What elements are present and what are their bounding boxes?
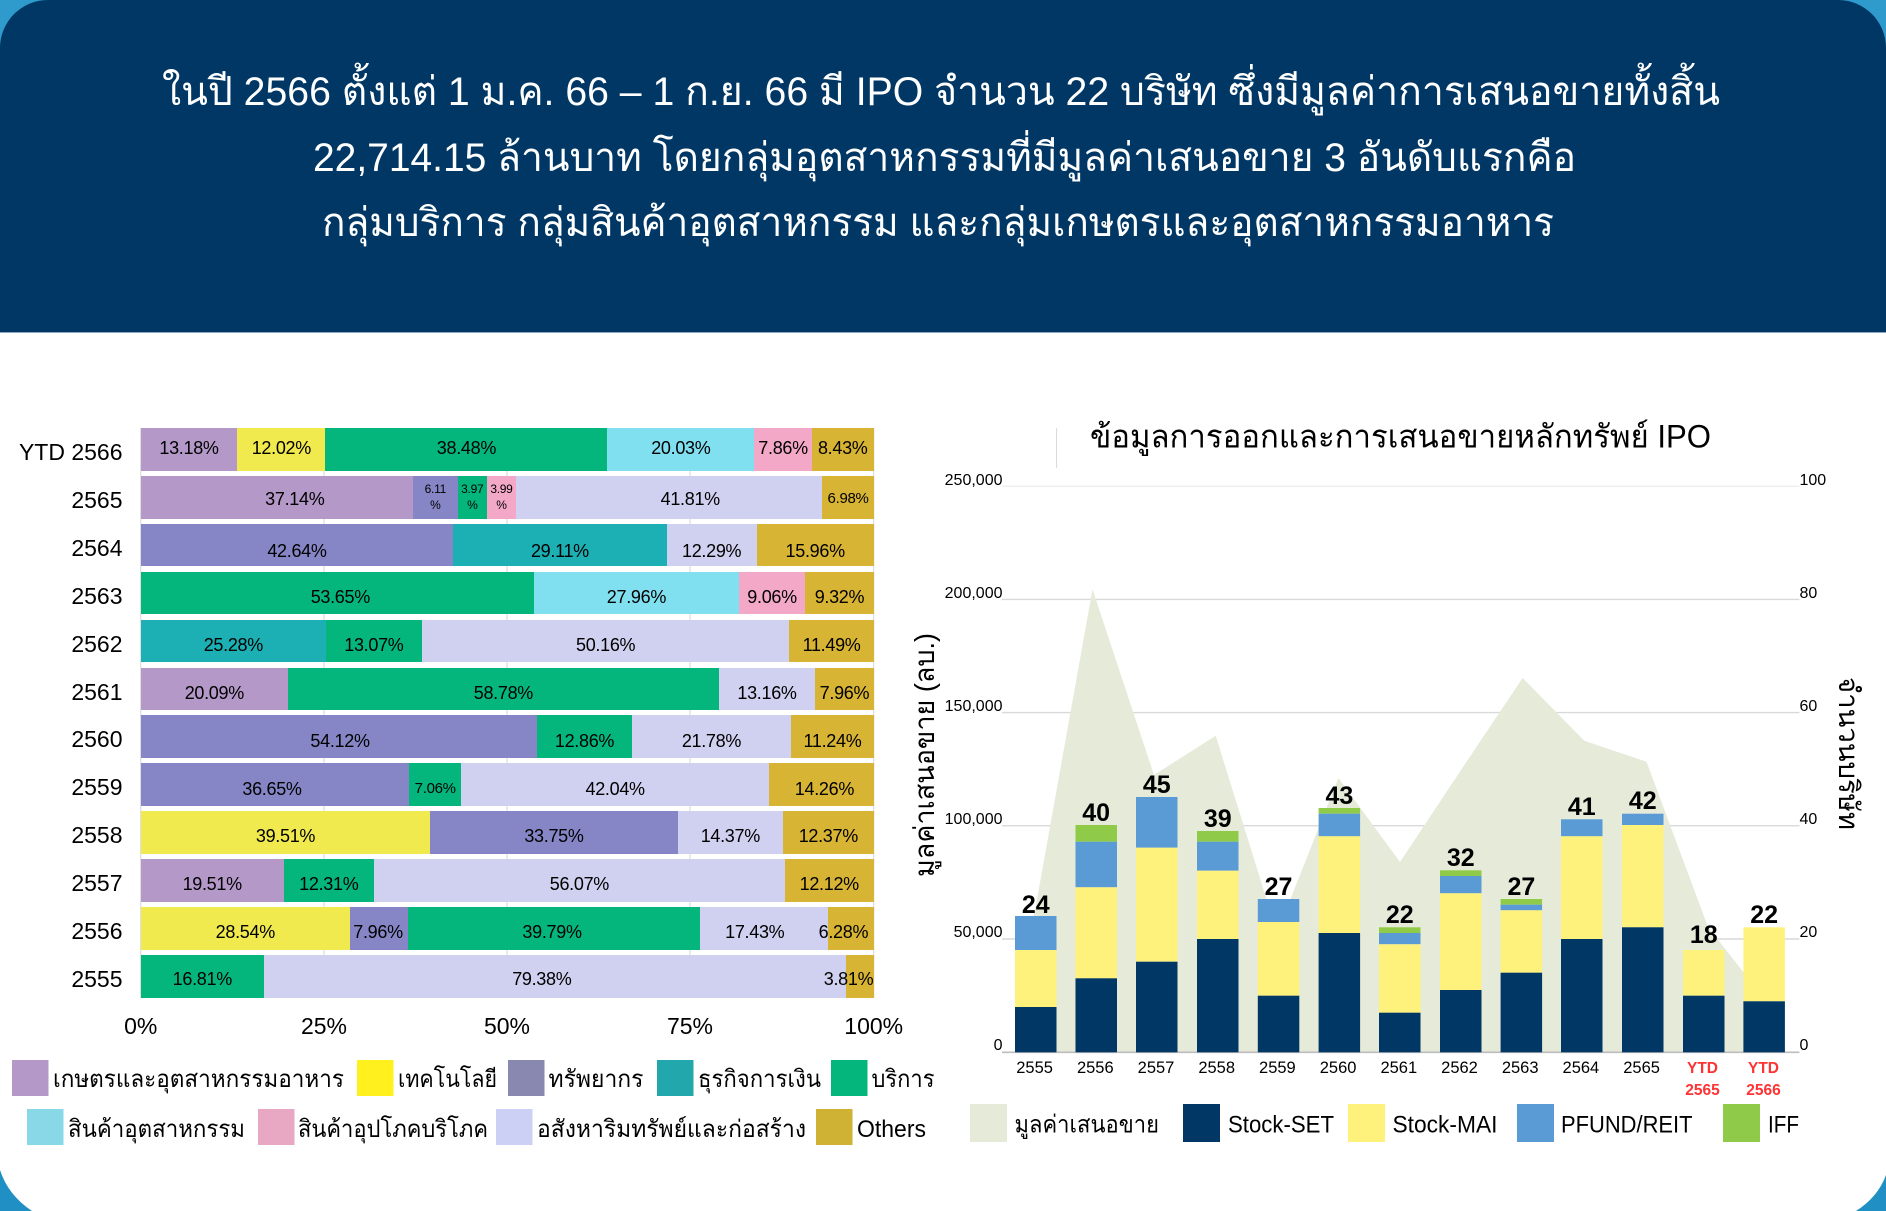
- right chart legend: [970, 1104, 1799, 1142]
- bar 2561: [141, 668, 874, 710]
- bar total labels: 27: [1265, 873, 1292, 901]
- bar 2563: [141, 572, 874, 614]
- right count axis labels: 80: [1800, 585, 1817, 602]
- bar 2556: 6.28%: [819, 922, 868, 942]
- x axis year labels: [1016, 1059, 1781, 1099]
- bar 2555: 3.81%: [824, 969, 873, 989]
- bar 2555: 16.81%: [173, 969, 232, 989]
- left value axis labels: 250,000: [945, 472, 1003, 489]
- bar YTD 2566: [1743, 927, 1785, 1052]
- bar 2556: [1076, 825, 1117, 1052]
- bar 2557: [141, 859, 874, 902]
- left value axis labels: [945, 472, 1003, 1054]
- bar YTD 2566: 38.48%: [437, 438, 496, 458]
- bar total labels: 18: [1690, 921, 1718, 949]
- bar 2565: [1622, 814, 1664, 1052]
- bar 2565: 37.14%: [265, 489, 324, 509]
- bar total labels: [1022, 771, 1778, 949]
- left chart percent axis: 50%: [484, 1013, 530, 1039]
- right count axis labels: 40: [1800, 811, 1817, 828]
- row 2561: 2561: [71, 678, 122, 704]
- right chart grid lines: [1002, 486, 1799, 939]
- x axis year labels: 2563: [1502, 1059, 1539, 1077]
- bar total labels: 42: [1629, 787, 1657, 815]
- left chart percent axis: 75%: [667, 1013, 713, 1039]
- x axis year labels: YTD: [1748, 1060, 1779, 1077]
- bar 2563: 9.32%: [815, 587, 864, 607]
- bar 2560: [1319, 808, 1360, 1052]
- row 2558: 2558: [71, 822, 122, 848]
- x axis year labels: 2565: [1623, 1059, 1660, 1077]
- bar total labels: 22: [1386, 901, 1414, 929]
- left value axis labels: 100,000: [945, 811, 1003, 828]
- right count axis labels: 20: [1800, 924, 1817, 941]
- bar 2558: 33.75%: [524, 826, 584, 846]
- row 2560: 2560: [71, 726, 122, 752]
- left chart percent axis: 0%: [124, 1013, 157, 1039]
- x axis year labels: 2555: [1016, 1059, 1053, 1077]
- bar 2561: 13.16%: [737, 683, 797, 703]
- bar YTD 2566: 12.02%: [252, 438, 311, 458]
- left chart legend: บริการ: [872, 1066, 935, 1093]
- bar 2558: 12.37%: [799, 826, 858, 846]
- bar 2564: 29.11%: [531, 541, 589, 561]
- header text: ในปี 2566 ตั้งแต่ 1 ม.ค. 66 – 1 ก.ย. 66 มี IPO จำนวน 22 บริษัท ซึ่งมีมูลค่าการเสนอขายทั้งสิ้น: [162, 62, 1720, 115]
- row 2564: 2564: [71, 535, 122, 561]
- row 2555: 2555: [71, 966, 122, 992]
- left value axis labels: 200,000: [945, 585, 1003, 602]
- bar 2565: 6.11: [425, 482, 446, 496]
- bar 2565: 3.99: [490, 482, 512, 496]
- bar total labels: 40: [1082, 799, 1110, 827]
- row 2559: 2559: [71, 774, 122, 800]
- x axis year labels: 2562: [1441, 1059, 1478, 1077]
- bar 2565: %: [430, 498, 440, 512]
- bar 2559: 36.65%: [242, 779, 302, 799]
- bar 2557: 19.51%: [183, 874, 242, 894]
- row 2563: 2563: [71, 583, 122, 609]
- bar 2561: 58.78%: [474, 683, 533, 703]
- bar 2562: 11.49%: [803, 635, 861, 655]
- bar 2563: 27.96%: [607, 587, 666, 607]
- row 2565: 2565: [71, 487, 122, 513]
- left axis title: มูลค่าเสนอขาย (ลบ.): [909, 633, 942, 877]
- right axis title: จำนวนบริษัท: [1833, 677, 1864, 830]
- bar total labels: 45: [1143, 771, 1171, 799]
- bar 2558: 14.37%: [701, 826, 760, 846]
- left value axis labels: 50,000: [954, 924, 1003, 941]
- bar 2556: 39.79%: [522, 922, 582, 942]
- bar YTD 2565: [1683, 950, 1724, 1052]
- right count axis labels: 60: [1800, 698, 1817, 715]
- left value axis labels: 150,000: [945, 698, 1003, 715]
- left chart legend: ธุรกิจการเงิน: [698, 1066, 821, 1094]
- bar total labels: 43: [1325, 782, 1353, 810]
- bar 2555: [1015, 916, 1056, 1052]
- bar 2564: [1561, 819, 1602, 1052]
- bar total labels: 24: [1022, 891, 1050, 919]
- bar YTD 2566: 13.18%: [159, 438, 219, 458]
- bar 2555: 79.38%: [512, 969, 571, 989]
- x axis year labels: 2558: [1198, 1059, 1235, 1077]
- x axis year labels: 2564: [1563, 1059, 1599, 1077]
- bar 2565: %: [467, 498, 477, 512]
- bar 2561: 7.96%: [820, 683, 869, 703]
- header text: [162, 62, 1720, 247]
- bar 2560: 12.86%: [555, 731, 614, 751]
- x axis year labels: 2566: [1746, 1082, 1781, 1099]
- bar 2558: 39.51%: [256, 826, 315, 846]
- bar 2565: 3.97: [461, 482, 483, 496]
- bar 2562: 50.16%: [576, 635, 635, 655]
- bar 2556: 28.54%: [216, 922, 275, 942]
- x axis year labels: 2557: [1138, 1059, 1174, 1077]
- bar 2556: 17.43%: [725, 922, 784, 942]
- bar YTD 2566: 20.03%: [651, 438, 710, 458]
- left value axis labels: 0: [994, 1037, 1003, 1054]
- header text: 22,714.15 ล้านบาท โดยกลุ่มอุตสาหกรรมที่มีมูลค่าเสนอขาย 3 อันดับแรกคือ: [313, 130, 1576, 182]
- bar 2562: 13.07%: [344, 635, 404, 655]
- bar 2565: [141, 476, 874, 519]
- bar 2557: [1136, 797, 1178, 1052]
- bar 2556: [141, 907, 874, 950]
- area series: offering value: [1031, 589, 1770, 1052]
- bar 2557: 56.07%: [550, 874, 609, 894]
- bar 2563: 53.65%: [311, 587, 370, 607]
- bar 2564: 15.96%: [786, 541, 845, 561]
- left chart legend: สินค้าอุปโภคบริโภค: [298, 1115, 488, 1144]
- bar 2557: 12.31%: [299, 874, 358, 894]
- bar 2565: 6.98%: [828, 490, 869, 507]
- bar 2564: 12.29%: [682, 541, 741, 561]
- bar 2559: 14.26%: [795, 779, 854, 799]
- left chart grid lines: [141, 428, 874, 998]
- bar 2555: [141, 955, 874, 998]
- bar 2563: [1501, 899, 1542, 1052]
- right chart legend: Stock-MAI: [1392, 1112, 1498, 1139]
- left chart legend: [12, 1060, 935, 1145]
- right chart legend: มูลค่าเสนอขาย: [1014, 1112, 1159, 1140]
- bar 2562: 25.28%: [204, 635, 263, 655]
- bar total labels: 32: [1447, 844, 1475, 872]
- header text: กลุ่มบริการ กลุ่มสินค้าอุตสาหกรรม และกลุ่มเกษตรและอุตสาหกรรมอาหาร: [322, 201, 1554, 247]
- bar total labels: 27: [1507, 873, 1535, 901]
- left chart legend: อสังหาริมทรัพย์และก่อสร้าง: [537, 1115, 806, 1143]
- right count axis labels: 100: [1800, 472, 1826, 489]
- left chart legend: Others: [857, 1116, 926, 1143]
- bar 2557: 12.12%: [800, 874, 859, 894]
- bar 2560: 21.78%: [682, 731, 741, 751]
- left chart percent axis: [124, 1013, 903, 1039]
- bar 2563: 9.06%: [747, 587, 797, 607]
- bar 2560: [141, 715, 874, 758]
- bar 2558: [141, 811, 874, 854]
- left chart percent axis: 100%: [844, 1013, 903, 1039]
- bar 2560: 11.24%: [803, 731, 861, 751]
- left chart legend: เทคโนโลยี: [398, 1065, 497, 1093]
- x axis year labels: 2561: [1380, 1059, 1417, 1077]
- bar 2565: 41.81%: [661, 489, 720, 509]
- bar 2560: 54.12%: [310, 731, 370, 751]
- x axis year labels: 2560: [1320, 1059, 1356, 1077]
- bar 2559: [1258, 899, 1299, 1052]
- bar 2564: 42.64%: [267, 541, 327, 561]
- row 2556: 2556: [71, 918, 122, 944]
- bar 2564: [141, 524, 874, 566]
- bar 2556: 7.96%: [353, 922, 403, 942]
- bar total labels: 22: [1750, 901, 1778, 929]
- bar YTD 2566: [141, 428, 874, 471]
- bar 2559: [141, 763, 874, 806]
- row 2557: 2557: [71, 870, 122, 896]
- x axis year labels: YTD: [1687, 1060, 1718, 1077]
- bar YTD 2566: 7.86%: [758, 438, 808, 458]
- right count axis labels: [1800, 472, 1826, 1054]
- header banner: [0, 0, 1886, 332]
- x axis year labels: 2556: [1077, 1059, 1114, 1077]
- bar 2562: [141, 620, 874, 662]
- x axis year labels: 2559: [1259, 1059, 1296, 1077]
- bar YTD 2566: 8.43%: [818, 438, 868, 458]
- row 2562: 2562: [71, 631, 122, 657]
- bar 2561: 20.09%: [185, 683, 244, 703]
- bar total labels: 41: [1568, 793, 1596, 821]
- x axis year labels: 2565: [1685, 1082, 1720, 1099]
- bar 2562: [1440, 870, 1482, 1052]
- left chart legend: ทรัพยากร: [548, 1066, 644, 1093]
- right chart legend: PFUND/REIT: [1561, 1112, 1693, 1139]
- bar 2565: %: [496, 498, 507, 512]
- row YTD 2566: YTD 2566: [19, 439, 122, 465]
- left chart percent axis: 25%: [301, 1013, 347, 1039]
- right chart title: ข้อมูลการออกและการเสนอขายหลักทรัพย์ IPO: [1090, 419, 1711, 457]
- left chart legend: สินค้าอุตสาหกรรม: [68, 1116, 245, 1144]
- left chart legend: เกษตรและอุตสาหกรรมอาหาร: [53, 1066, 344, 1094]
- bar 2559: 7.06%: [415, 780, 456, 797]
- stacked bars: [1015, 797, 1785, 1052]
- bar total labels: 39: [1204, 805, 1232, 833]
- left stacked percent bar chart: [19, 428, 874, 998]
- bar 2561: [1379, 927, 1420, 1052]
- right count axis labels: 0: [1800, 1037, 1808, 1054]
- x axis line: [1002, 1051, 1799, 1053]
- bar 2558: [1197, 831, 1238, 1052]
- bar 2559: 42.04%: [586, 779, 645, 799]
- right chart legend: Stock-SET: [1228, 1112, 1334, 1139]
- right chart legend: IFF: [1768, 1112, 1799, 1139]
